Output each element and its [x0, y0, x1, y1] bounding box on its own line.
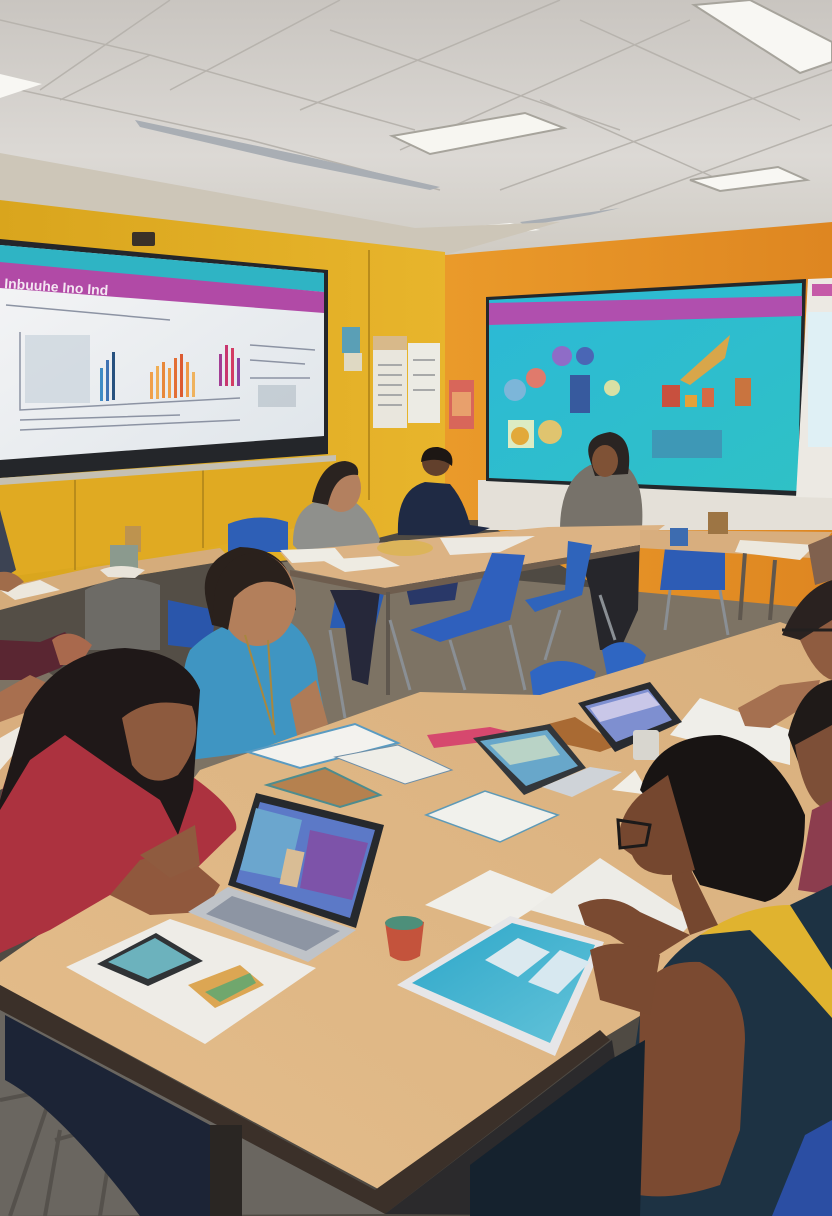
back-right tablet: [578, 682, 682, 760]
printed sheet with phone: [66, 919, 316, 1044]
yellow wall: [0, 200, 450, 590]
wall posters: [342, 327, 474, 429]
left papers on table: [0, 680, 100, 790]
papers on table: [425, 698, 790, 935]
back person: student in dark shirt: [395, 447, 490, 605]
back person: student in gray shirt: [293, 461, 380, 685]
lower wall paneling: [0, 250, 832, 578]
left shadow under back table: [0, 560, 300, 720]
large tablet: [397, 916, 604, 1056]
ceiling lights: [0, 0, 832, 239]
floor: [0, 560, 832, 790]
screen title: Inbuuhe Ino Ind: [4, 275, 109, 298]
open notebook: [248, 724, 452, 784]
back tables: [0, 525, 832, 695]
back left person arm: [0, 510, 24, 592]
laptop: [188, 793, 384, 962]
screen ledge: [0, 455, 336, 485]
orange wall: [445, 222, 832, 620]
right whiteboard: [796, 278, 832, 498]
center tablet: [473, 724, 622, 797]
back person: woman at screen: [560, 432, 642, 650]
screen illustrations: [504, 335, 751, 458]
colorful booklet: [267, 768, 380, 807]
table legs and floor: [0, 1010, 640, 1216]
left edge student arm: [0, 632, 92, 722]
foreground student: [470, 735, 832, 1216]
pink pouch: [427, 727, 515, 748]
near chairs at back table: [390, 541, 646, 710]
back table items: [0, 512, 815, 600]
right side student: [738, 535, 832, 728]
far-right student: [788, 680, 832, 895]
ceiling: [0, 0, 832, 260]
front table: [0, 622, 832, 1214]
soffit: [0, 153, 560, 255]
camera: [132, 232, 155, 246]
left seated student legs: [5, 1015, 210, 1216]
right screen: [486, 279, 806, 496]
student in red sweater: [0, 648, 236, 953]
mug: [385, 916, 424, 961]
back chairs: [85, 517, 728, 718]
bar chart: [100, 345, 240, 401]
brown folder: [533, 717, 618, 752]
left screen: [0, 239, 328, 478]
student in blue shirt: [182, 547, 328, 760]
